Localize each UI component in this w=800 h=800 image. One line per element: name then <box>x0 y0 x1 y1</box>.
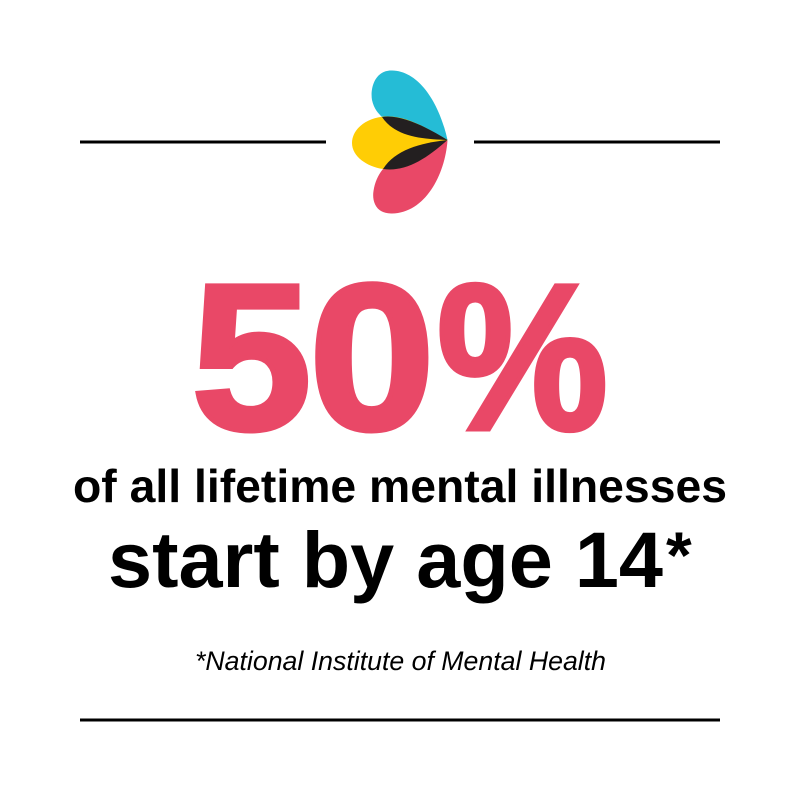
text: start by age 14*: * <box>666 518 692 592</box>
big statistic: 50%: 0 <box>309 242 435 474</box>
text: start by age 14*: start by age 14 <box>108 515 663 604</box>
big statistic: 50%: 5 <box>192 242 312 474</box>
icon: three-petal logo <box>352 70 448 214</box>
big statistic: 50% <box>192 242 608 474</box>
text: of all lifetime mental illnesses: of all lifetime mental illnesses <box>73 460 727 512</box>
source note: *National Institute of Mental Health <box>195 646 606 676</box>
big statistic: 50%: % <box>437 242 608 474</box>
